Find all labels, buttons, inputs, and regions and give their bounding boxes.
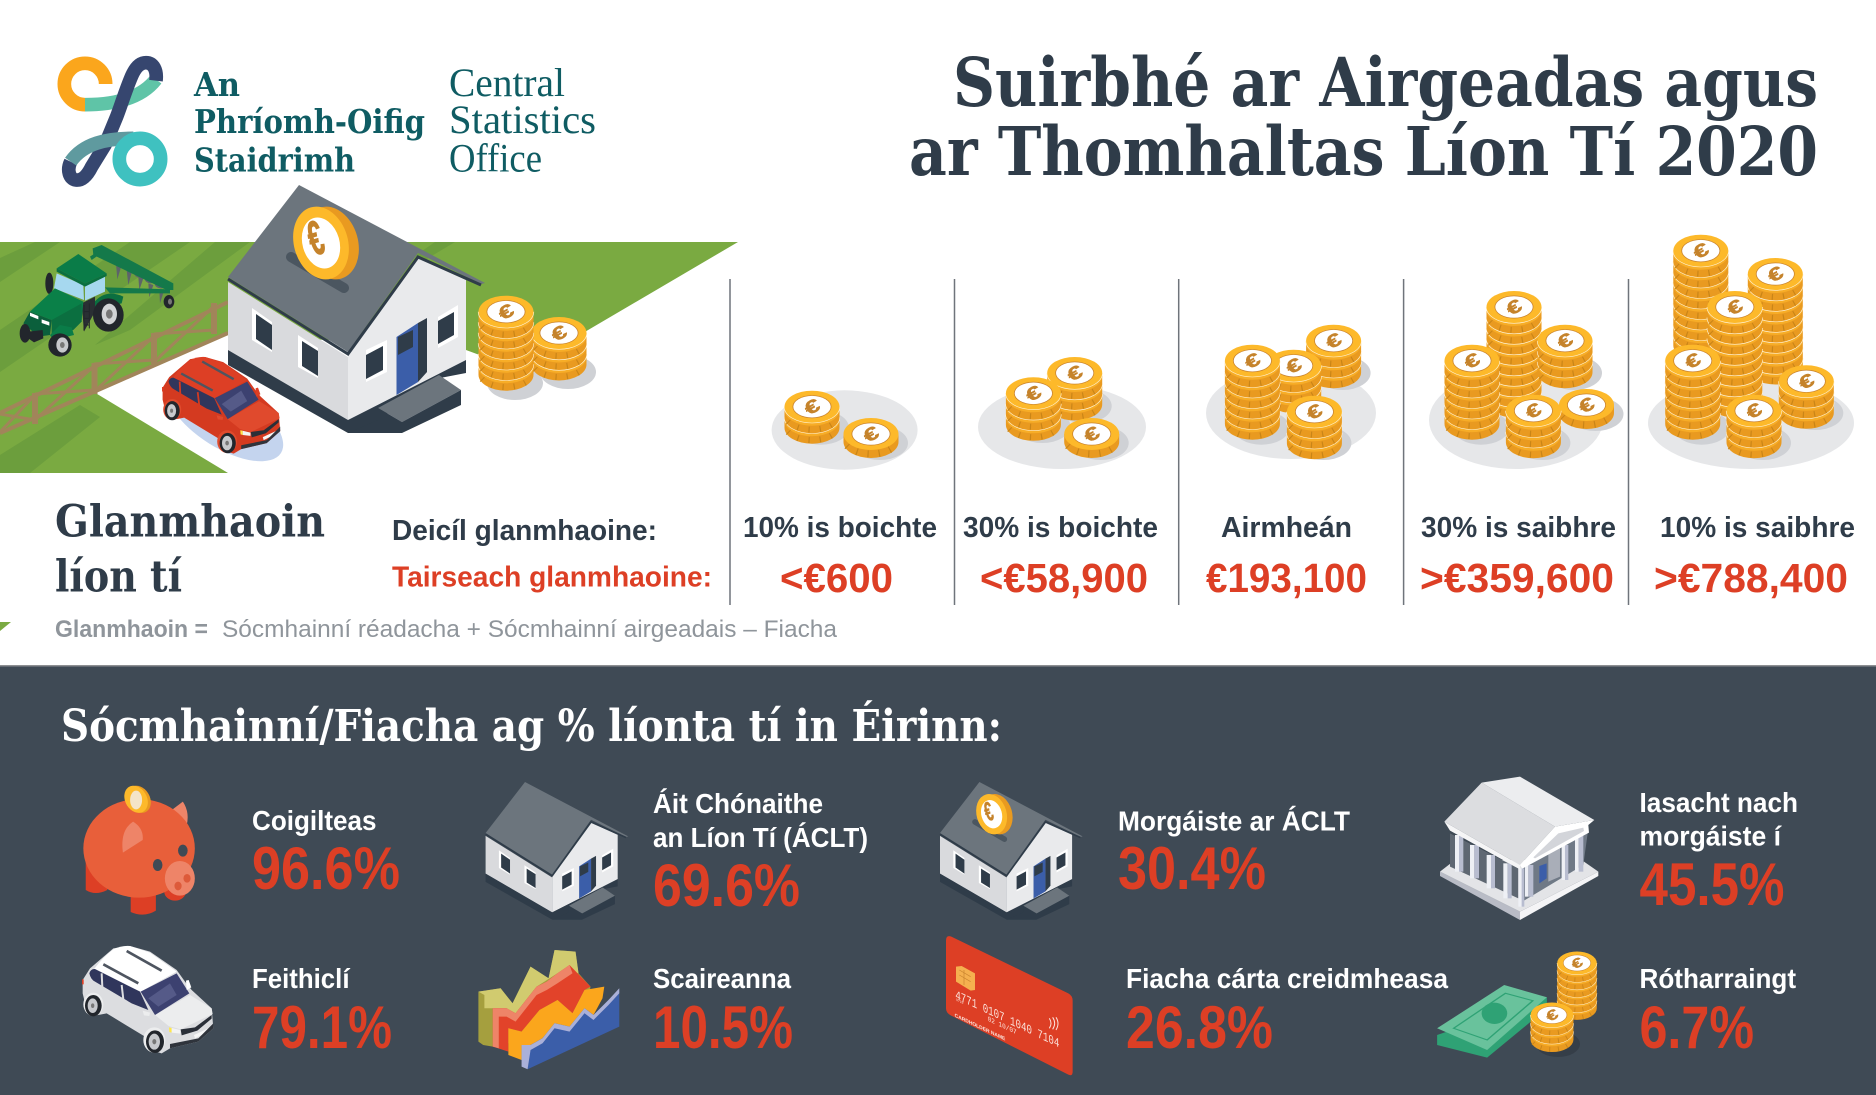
coins: median [1206,325,1376,460]
coins: median: € [1282,353,1305,378]
stat: credit card debt: 26.8% [1126,994,1273,1061]
heading: household net wealth: Glanmhaoin [55,496,325,548]
net wealth formula: Glanmhaoin = [55,616,208,643]
decile threshold values: €193,100 [1206,555,1367,601]
stat: overdraft: Rótharraingt [1640,963,1796,994]
icon: house [486,782,628,920]
panel: assets and debts [0,665,1876,1095]
stat: savings [252,805,400,902]
fence [0,302,228,433]
house with coin slot: € [301,211,330,267]
coins: 10% richest: € [1681,348,1704,373]
coin stacks by the house: € [495,299,518,324]
panel heading: Sócmhainní/Fiacha ag % líonta tí in Éirinn: [61,699,1002,752]
red car [153,357,297,478]
decile threshold values: <€600 [780,555,893,601]
decile labels [743,512,1855,544]
stat: savings: Coigilteas [252,805,376,836]
house with coin slot [228,185,485,433]
icon: share chart [478,950,619,1069]
coins: median: € [1322,328,1345,353]
stat: non-mortgage loan: Iasacht nach [1640,787,1798,818]
stat: mortgage [1118,806,1350,902]
logo Irish name [193,65,425,180]
logo English name: Statistics [449,97,596,142]
decile labels: Airmheán [1221,512,1352,544]
icon: credit card [946,936,1073,1075]
icon: house with coin [940,782,1083,920]
logo Irish name: Staidrimh [194,140,355,180]
coins: 30% poorest: € [1022,380,1045,406]
logo mark [64,63,161,180]
stat: shares: 10.5% [653,994,793,1061]
logo English name: Central [449,60,565,105]
decile threshold values: >€788,400 [1654,555,1848,601]
green field [0,242,738,473]
icon: piggy bank [83,785,195,915]
decile threshold values: >€359,600 [1420,555,1614,601]
decile labels: 30% is saibhre [1421,512,1616,544]
coins: 10% richest: € [1795,368,1818,394]
icon: white car [82,946,213,1053]
coins: 30% richest: € [1522,398,1545,423]
stat: credit card debt: Fiacha cárta creidmheasa [1126,963,1448,994]
stat: non-mortgage loan: morgáiste í [1640,820,1782,852]
stat: vehicles: Feithiclí [252,963,351,994]
stat: overdraft [1640,963,1796,1061]
stat: main residence: an Líon Tí (ÁCLT) [653,822,868,853]
decile labels: 10% is boichte [743,512,937,544]
coin stacks by the house [478,296,596,400]
logo Irish name: An [193,65,240,104]
icon: bank [1440,777,1598,920]
heading: household net wealth: líon tí [55,552,182,602]
coins: 10% poorest [772,390,918,470]
stat: shares [653,963,793,1061]
stat: main residence: 69.6% [653,852,800,919]
field stripes [0,242,455,473]
decile threshold values: <€58,900 [980,555,1148,601]
stat: vehicles: 79.1% [252,994,392,1061]
coins: median: € [1241,348,1264,373]
stat: vehicles [252,963,392,1061]
title [909,43,1818,191]
stat: shares: Scaireanna [653,963,791,994]
icon: house with coin: € [980,795,997,827]
decile labels: 30% is boichte [963,512,1158,544]
stat: mortgage: 30.4% [1118,835,1266,902]
row labels [392,515,712,594]
heading: household net wealth [55,496,325,602]
decile labels: 10% is saibhre [1660,512,1855,544]
stat: main residence: Áit Chónaithe [653,788,823,819]
icon: credit card: CARDHOLDER NAME [955,1013,1006,1043]
coins: 10% richest: € [1764,261,1787,287]
stat: non-mortgage loan: 45.5% [1640,851,1784,918]
stat: savings: 96.6% [252,835,400,902]
tractor [20,245,174,357]
coins: 30% richest: € [1554,328,1577,353]
net wealth formula: Sócmhainní réadacha + Sócmhainní airgeadais – Fiacha [222,616,838,643]
coins: 10% richest: € [1743,398,1766,423]
icon: cash and coins [1437,951,1597,1058]
icon: cash and coins: € [1569,955,1585,972]
stat: mortgage: Morgáiste ar ÁCLT [1118,806,1350,836]
logo English name [449,60,596,180]
farm illustration [0,185,738,478]
decile threshold values [780,555,1848,601]
coins: 10% richest: € [1689,238,1713,263]
small field corner [0,622,11,631]
coins: 30% poorest: € [1080,421,1103,447]
coins: 30% poorest [978,357,1146,469]
coins: 30% richest: € [1503,294,1526,320]
icon: credit card: 02 10/07 [988,1016,1017,1037]
coins: 10% richest: € [1723,294,1747,320]
decile dividers [730,279,1628,605]
CSO logo [64,60,596,180]
coins: 30% richest [1429,291,1624,469]
coins: 30% poorest: € [1063,360,1086,386]
coin stacks by the house: € [548,320,571,346]
coins: median: € [1303,399,1326,424]
stat: main residence [653,788,868,919]
coins: 30% richest: € [1461,348,1484,373]
icon: cash and coins: € [1543,1005,1561,1025]
icon: credit card: 0719 [956,998,963,1005]
stat: non-mortgage loan [1640,787,1798,918]
coins: 10% richest [1648,235,1854,469]
coins: 30% richest: € [1575,392,1598,418]
row labels: Tairseach glanmhaoine: [392,562,712,594]
row labels: Deicíl glanmhaoine: [392,515,657,547]
stat: overdraft: 6.7% [1640,994,1754,1061]
coins: 10% poorest: € [860,421,883,447]
logo Irish name: Phríomh-Oifig [194,102,425,141]
stat: credit card debt [1126,963,1448,1061]
coins: 10% poorest: € [801,394,824,419]
icon: credit card: 4771 0107 1040 7104 [955,989,1059,1052]
logo English name: Office [449,136,542,180]
